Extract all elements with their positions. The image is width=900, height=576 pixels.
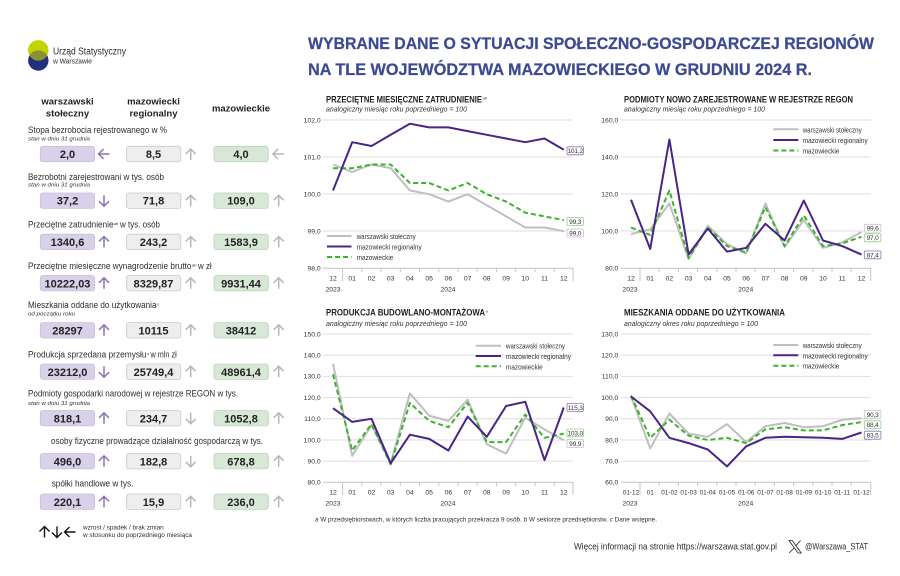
row: przeciętne zatrudnienie: ab	[114, 221, 119, 226]
chart: mieszkania oddane do użytkowania: 01-05	[719, 490, 736, 496]
chart: podmioty nowo zarejestrowane: 2023	[622, 287, 638, 294]
row: podmioty gospodarki narodowej: 1052,8	[224, 413, 258, 425]
data labels: 99,9	[569, 441, 582, 448]
row: bezrobotni zarejestrowani: 37,2	[57, 196, 78, 208]
chart: produkcja budowlano-montażowa: 12	[329, 490, 337, 496]
row: spółki handlowe: 236,0	[227, 497, 255, 509]
row: wynagrodzenie brutto: Przeciętne miesięczne wynagrodzenie brutto	[28, 261, 192, 271]
chart: podmioty nowo zarejestrowane: 160,0	[601, 117, 619, 124]
chart: mieszkania oddane do użytkowania: 01-07	[757, 490, 774, 496]
footer: more information link: Więcej informacji na stronie https://warszawa.stat.gov.pl	[574, 540, 777, 551]
row: produkcja sprzedana przemysłu: 23212,0	[48, 367, 87, 379]
chart: przeciętne miesięczne zatrudnienie: 06	[445, 276, 452, 282]
row: podmioty gospodarki narodowej: Podmioty gospodarki narodowej w rejestrze REGON w tys.	[28, 389, 238, 399]
row: stopa bezrobocia: 4,0	[233, 149, 249, 161]
chart: produkcja budowlano-montażowa: 09	[502, 490, 510, 496]
chart: produkcja budowlano-montażowa: 120,0	[304, 395, 321, 402]
chart: przeciętne miesięczne zatrudnienie: 2024	[440, 287, 456, 294]
chart: przeciętne miesięczne zatrudnienie: 11	[541, 276, 548, 282]
row: osoby fizyczne: osoby fizyczne prowadzące działalność gospodarczą w tys.	[51, 436, 263, 446]
legend: mazowiecki regionalny	[506, 352, 571, 361]
row: wynagrodzenie brutto: w zł	[197, 261, 212, 271]
chart: mieszkania oddane do użytkowania: 01-02	[661, 490, 678, 496]
row: wynagrodzenie brutto: 10222,03	[45, 278, 90, 290]
chart: podmioty nowo zarejestrowane: analogiczny miesiąc roku poprzedniego = 100	[624, 105, 766, 114]
row: mieszkania oddane do użytkowania: Mieszkania oddane do użytkowania	[28, 300, 156, 310]
table column headings: mazowiecki	[127, 96, 180, 108]
chart: produkcja budowlano-montażowa: 08	[483, 490, 491, 496]
row: stopa bezrobocia	[28, 125, 284, 162]
chart: podmioty nowo zarejestrowane: 04	[704, 276, 712, 282]
row: wynagrodzenie brutto	[28, 261, 284, 291]
chart: przeciętne miesięczne zatrudnienie: 05	[425, 276, 433, 282]
row: osoby fizyczne: 182,8	[140, 456, 167, 468]
row: osoby fizyczne: 496,0	[54, 456, 81, 468]
data labels: 99,0	[569, 230, 582, 237]
row: stopa bezrobocia: 8,5	[146, 149, 161, 161]
data labels: 88,4	[867, 422, 879, 429]
chart: produkcja budowlano-montażowa: 11	[541, 490, 548, 496]
chart: przeciętne miesięczne zatrudnienie: 12	[329, 276, 337, 282]
data labels	[864, 224, 881, 259]
series: mazowiecki regionalny	[631, 140, 862, 255]
row: produkcja sprzedana przemysłu: Produkcja sprzedana przemysłu	[28, 349, 146, 359]
chart: mieszkania oddane do użytkowania: analogiczny okres roku poprzedniego = 100	[624, 319, 759, 328]
legend	[773, 341, 868, 371]
data labels: 101,2	[567, 148, 583, 155]
data labels	[567, 403, 583, 448]
series: mazowieckie	[333, 374, 564, 464]
chart: podmioty nowo zarejestrowane: 05	[723, 276, 731, 282]
row: stopa bezrobocia: 2,0	[60, 149, 75, 161]
chart: przeciętne miesięczne zatrudnienie: 04	[406, 276, 414, 282]
series: mazowieckie	[631, 396, 862, 443]
row: podmioty gospodarki narodowej	[28, 389, 284, 426]
data labels: 99,3	[569, 219, 582, 226]
legend: mazowiecki regionalny	[357, 242, 422, 252]
row: przeciętne zatrudnienie: w tys. osób	[119, 219, 160, 229]
chart title: PRODUKCJA BUDOWLANO-MONTAŻOWA	[326, 307, 485, 317]
legend: mazowieckie	[357, 253, 393, 262]
chart: mieszkania oddane do użytkowania: 01-11	[834, 490, 851, 496]
logo: Urząd Statystyczny w Warszawie: Urząd Statystyczny	[53, 46, 126, 57]
row: przeciętne zatrudnienie	[28, 219, 284, 250]
row: bezrobotni zarejestrowani: 71,8	[143, 196, 164, 208]
series: mazowieckie	[631, 190, 862, 258]
footnotes: a W przedsiębiorstwach, w których liczba pracujących przekracza 9 osób. b W sektorze przedsiębiorstw. c Dane wstępne.	[315, 517, 657, 524]
row: produkcja sprzedana przemysłu: w mln zł	[150, 349, 177, 359]
chart: mieszkania oddane do użytkowania: 01-12	[623, 490, 640, 496]
chart: przeciętne miesięczne zatrudnienie: 09	[502, 276, 510, 282]
chart: przeciętne miesięczne zatrudnienie: 03	[387, 276, 395, 282]
row: produkcja sprzedana przemysłu	[28, 349, 284, 379]
chart: podmioty nowo zarejestrowane: 2024	[738, 287, 753, 294]
chart: mieszkania oddane do użytkowania: 120,0	[601, 352, 619, 360]
row: produkcja sprzedana przemysłu: 48961,4	[221, 367, 262, 379]
chart: podmioty nowo zarejestrowane: 02	[666, 276, 673, 282]
chart: podmioty nowo zarejestrowane: 06	[742, 276, 750, 282]
chart: mieszkania oddane do użytkowania: 80,0	[605, 437, 619, 444]
chart: mieszkania oddane do użytkowania: 100,0	[601, 395, 619, 402]
chart: przeciętne miesięczne zatrudnienie: 102,0	[304, 117, 321, 124]
chart: przeciętne miesięczne zatrudnienie: analogiczny miesiąc roku poprzedniego = 100	[326, 105, 468, 114]
legend: mazowieckie	[803, 146, 839, 156]
legend: mazowiecki regionalny	[803, 136, 868, 145]
chart: przeciętne miesięczne zatrudnienie: 12	[560, 276, 568, 282]
chart: podmioty nowo zarejestrowane: 08	[781, 276, 789, 282]
row: przeciętne zatrudnienie: Przeciętne zatrudnienie	[28, 219, 114, 229]
chart: produkcja budowlano-montażowa: 90,0	[307, 458, 321, 465]
chart: mieszkania oddane do użytkowania: 01-12	[853, 490, 870, 496]
chart: mieszkania oddane do użytkowania: 01-10	[815, 490, 832, 496]
row: spółki handlowe	[40, 479, 284, 509]
chart: produkcja budowlano-montażowa: 140,0	[304, 352, 321, 360]
table column headings	[40, 96, 270, 120]
row: spółki handlowe: 15,9	[143, 497, 164, 509]
row: mieszkania oddane do użytkowania: c	[157, 302, 159, 307]
chart: mieszkania oddane do użytkowania: 01	[647, 490, 654, 496]
chart: produkcja budowlano-montażowa: 80,0	[307, 480, 321, 487]
row: podmioty gospodarki narodowej: 234,7	[140, 413, 167, 425]
arrows legend: w stosunku do poprzedniego miesiąca	[82, 532, 192, 539]
chart: mieszkania oddane do użytkowania: 70,0	[605, 458, 619, 465]
series: mazowiecki regionalny	[333, 402, 564, 463]
row: mieszkania oddane do użytkowania	[28, 300, 284, 338]
chart: produkcja budowlano-montażowa: 100,0	[304, 437, 321, 444]
chart: mieszkania oddane do użytkowania: 01-08	[776, 490, 793, 496]
chart: podmioty nowo zarejestrowane	[601, 94, 881, 294]
row: mieszkania oddane do użytkowania: 28297	[52, 325, 83, 337]
title: NA TLE WOJEWÓDZTWA MAZOWIECKIEGO W GRUDNIU 2024 R.	[308, 60, 812, 79]
chart: produkcja budowlano-montażowa: 2023	[325, 501, 341, 508]
chart: mieszkania oddane do użytkowania: 110,0	[602, 374, 619, 381]
chart title: PRZECIĘTNE MIESIĘCZNE ZATRUDNIENIE	[326, 94, 482, 104]
row: produkcja sprzedana przemysłu: a	[147, 351, 150, 356]
chart: mieszkania oddane do użytkowania: 01-06	[738, 490, 755, 496]
chart: mieszkania oddane do użytkowania: 90,0	[605, 416, 619, 423]
chart: podmioty nowo zarejestrowane: 140,0	[601, 154, 619, 161]
arrows legend	[40, 524, 192, 539]
legend	[476, 342, 571, 371]
series: warszawski stołeczny	[631, 203, 862, 259]
chart: produkcja budowlano-montażowa: 05	[425, 490, 433, 496]
chart: przeciętne miesięczne zatrudnienie: ab	[482, 96, 488, 100]
chart: produkcja budowlano-montażowa: 07	[464, 490, 472, 496]
legend: warszawski stołeczny	[356, 232, 416, 241]
row: wynagrodzenie brutto: 8329,87	[134, 278, 173, 290]
data labels: 90,3	[867, 412, 879, 419]
chart: mieszkania oddane do użytkowania: 2024	[738, 501, 753, 508]
chart: produkcja budowlano-montażowa: 03	[387, 490, 395, 496]
row: stopa bezrobocia: stan w dniu 31 grudnia	[28, 137, 91, 143]
row: mieszkania oddane do użytkowania: 38412	[226, 325, 256, 337]
chart: przeciętne miesięczne zatrudnienie: 101,0	[304, 154, 321, 161]
row: mieszkania oddane do użytkowania: 10115	[139, 325, 168, 337]
chart: przeciętne miesięczne zatrudnienie: 2023	[325, 287, 341, 294]
row: stopa bezrobocia: Stopa bezrobocia rejestrowanego w %	[28, 125, 167, 135]
title: WYBRANE DANE O SYTUACJI SPOŁECZNO-GOSPODARCZEJ REGIONÓW	[308, 34, 875, 53]
chart: produkcja budowlano-montażowa: 130,0	[304, 374, 321, 381]
chart: produkcja budowlano-montażowa: 110,0	[304, 416, 321, 423]
series: warszawski stołeczny	[631, 396, 862, 448]
chart: przeciętne miesięczne zatrudnienie: 07	[464, 276, 472, 282]
row: wynagrodzenie brutto: ab	[192, 263, 197, 268]
legend: mazowiecki regionalny	[803, 351, 868, 360]
row: osoby fizyczne	[40, 436, 284, 469]
table column headings: regionalny	[129, 109, 178, 120]
chart: podmioty nowo zarejestrowane: 07	[762, 276, 769, 282]
chart: produkcja budowlano-montażowa: 01	[348, 490, 356, 496]
row: podmioty gospodarki narodowej: 818,1	[54, 413, 81, 425]
chart: mieszkania oddane do użytkowania: 2023	[622, 501, 638, 508]
table column headings: stołeczny	[46, 109, 90, 120]
chart: podmioty nowo zarejestrowane: 100,0	[601, 228, 619, 235]
series: warszawski stołeczny	[333, 364, 564, 463]
chart title: PODMIOTY NOWO ZAREJESTROWANE W REJESTRZE REGON	[624, 94, 853, 104]
chart: produkcja budowlano-montażowa: analogiczny miesiąc roku poprzedniego = 100	[326, 319, 468, 328]
data labels: 103,0	[567, 430, 583, 437]
chart: podmioty nowo zarejestrowane: 80,0	[605, 266, 619, 273]
data labels: 115,3	[568, 405, 583, 412]
chart: przeciętne miesięczne zatrudnienie: 02	[368, 276, 375, 282]
legend: warszawski stołeczny	[505, 342, 565, 351]
chart: produkcja budowlano-montażowa: 10	[522, 490, 529, 496]
chart: produkcja budowlano-montażowa: 04	[406, 490, 414, 496]
chart: podmioty nowo zarejestrowane: 12	[858, 276, 865, 282]
icon: X	[789, 540, 801, 553]
chart: produkcja budowlano-montażowa	[304, 307, 583, 508]
chart: produkcja budowlano-montażowa: a	[486, 308, 488, 313]
chart: produkcja budowlano-montażowa: 06	[445, 490, 452, 496]
table column headings: warszawski	[40, 96, 94, 108]
row: przeciętne zatrudnienie: 243,2	[140, 237, 167, 249]
chart: przeciętne miesięczne zatrudnienie: 100,0	[304, 191, 321, 198]
data labels: 99,6	[867, 226, 879, 233]
table column headings: mazowieckie	[212, 104, 270, 115]
row: wynagrodzenie brutto: 9931,44	[221, 278, 262, 290]
row: spółki handlowe: 220,1	[54, 497, 81, 509]
arrows legend: wzrost / spadek / brak zmian	[82, 524, 164, 531]
data labels: 87,4	[867, 252, 879, 259]
chart: podmioty nowo zarejestrowane: 10	[819, 276, 827, 282]
chart: przeciętne miesięczne zatrudnienie: 98,0	[307, 266, 321, 273]
chart: podmioty nowo zarejestrowane: 11	[839, 276, 846, 282]
chart title: MIESZKANIA ODDANE DO UŻYTKOWANIA	[624, 307, 785, 317]
legend: mazowieckie	[506, 362, 543, 371]
chart: mieszkania oddane do użytkowania: 01-04	[700, 490, 716, 496]
row: spółki handlowe: spółki handlowe w tys.	[52, 479, 133, 489]
chart: mieszkania oddane do użytkowania: 01-03	[680, 490, 697, 496]
logo: Urząd Statystyczny w Warszawie	[28, 40, 126, 71]
chart: mieszkania oddane do użytkowania	[601, 307, 881, 508]
chart: przeciętne miesięczne zatrudnienie: 99,0	[307, 228, 321, 235]
row: bezrobotni zarejestrowani: Bezrobotni zarejestrowani w tys. osób	[28, 172, 164, 182]
data labels: 83,5	[867, 433, 879, 440]
chart: przeciętne miesięczne zatrudnienie: 01	[348, 276, 356, 282]
row: bezrobotni zarejestrowani: stan w dniu 31 grudnia	[28, 183, 91, 189]
chart: przeciętne miesięczne zatrudnienie: 10	[522, 276, 529, 282]
legend	[773, 125, 868, 156]
row: mieszkania oddane do użytkowania: od początku roku	[28, 312, 76, 318]
row: osoby fizyczne: 678,8	[227, 456, 255, 468]
row: bezrobotni zarejestrowani	[28, 172, 284, 208]
row: przeciętne zatrudnienie: 1340,6	[51, 237, 84, 249]
chart: podmioty nowo zarejestrowane: 09	[800, 276, 808, 282]
chart: podmioty nowo zarejestrowane: 12	[627, 276, 635, 282]
chart: produkcja budowlano-montażowa: 150,0	[304, 331, 321, 338]
data labels	[864, 410, 881, 440]
chart: podmioty nowo zarejestrowane: 01	[646, 276, 654, 282]
legend: mazowieckie	[803, 362, 839, 371]
chart: produkcja budowlano-montażowa: 2024	[440, 501, 456, 508]
series: warszawski stołeczny	[333, 164, 564, 231]
row: produkcja sprzedana przemysłu: 25749,4	[134, 367, 174, 379]
logo: Urząd Statystyczny w Warszawie: w Warszawie	[52, 58, 92, 65]
legend: warszawski stołeczny	[802, 125, 862, 134]
row: bezrobotni zarejestrowani: 109,0	[227, 196, 255, 208]
chart: mieszkania oddane do użytkowania: 01-09	[796, 490, 812, 496]
chart: mieszkania oddane do użytkowania: 60,0	[605, 480, 619, 487]
title	[308, 34, 875, 79]
series: mazowiecki regionalny	[333, 124, 564, 190]
series: mazowiecki regionalny	[631, 396, 862, 466]
chart: produkcja budowlano-montażowa: 02	[368, 490, 375, 496]
legend: warszawski stołeczny	[802, 341, 862, 350]
legend	[327, 232, 422, 262]
data labels	[567, 147, 583, 237]
footer: X handle: @Warszawa_STAT	[805, 541, 869, 551]
chart: podmioty nowo zarejestrowane: 03	[685, 276, 693, 282]
row: podmioty gospodarki narodowej: stan w dniu 31 grudnia	[28, 401, 91, 407]
row: przeciętne zatrudnienie: 1583,9	[224, 237, 258, 249]
series: mazowieckie	[333, 164, 564, 220]
chart: mieszkania oddane do użytkowania: 130,0	[601, 331, 619, 338]
chart: podmioty nowo zarejestrowane: 120,0	[601, 191, 619, 198]
chart: przeciętne miesięczne zatrudnienie	[304, 94, 583, 294]
chart: przeciętne miesięczne zatrudnienie: 08	[483, 276, 491, 282]
data labels: 97,0	[867, 235, 879, 242]
chart: produkcja budowlano-montażowa: 12	[560, 490, 568, 496]
